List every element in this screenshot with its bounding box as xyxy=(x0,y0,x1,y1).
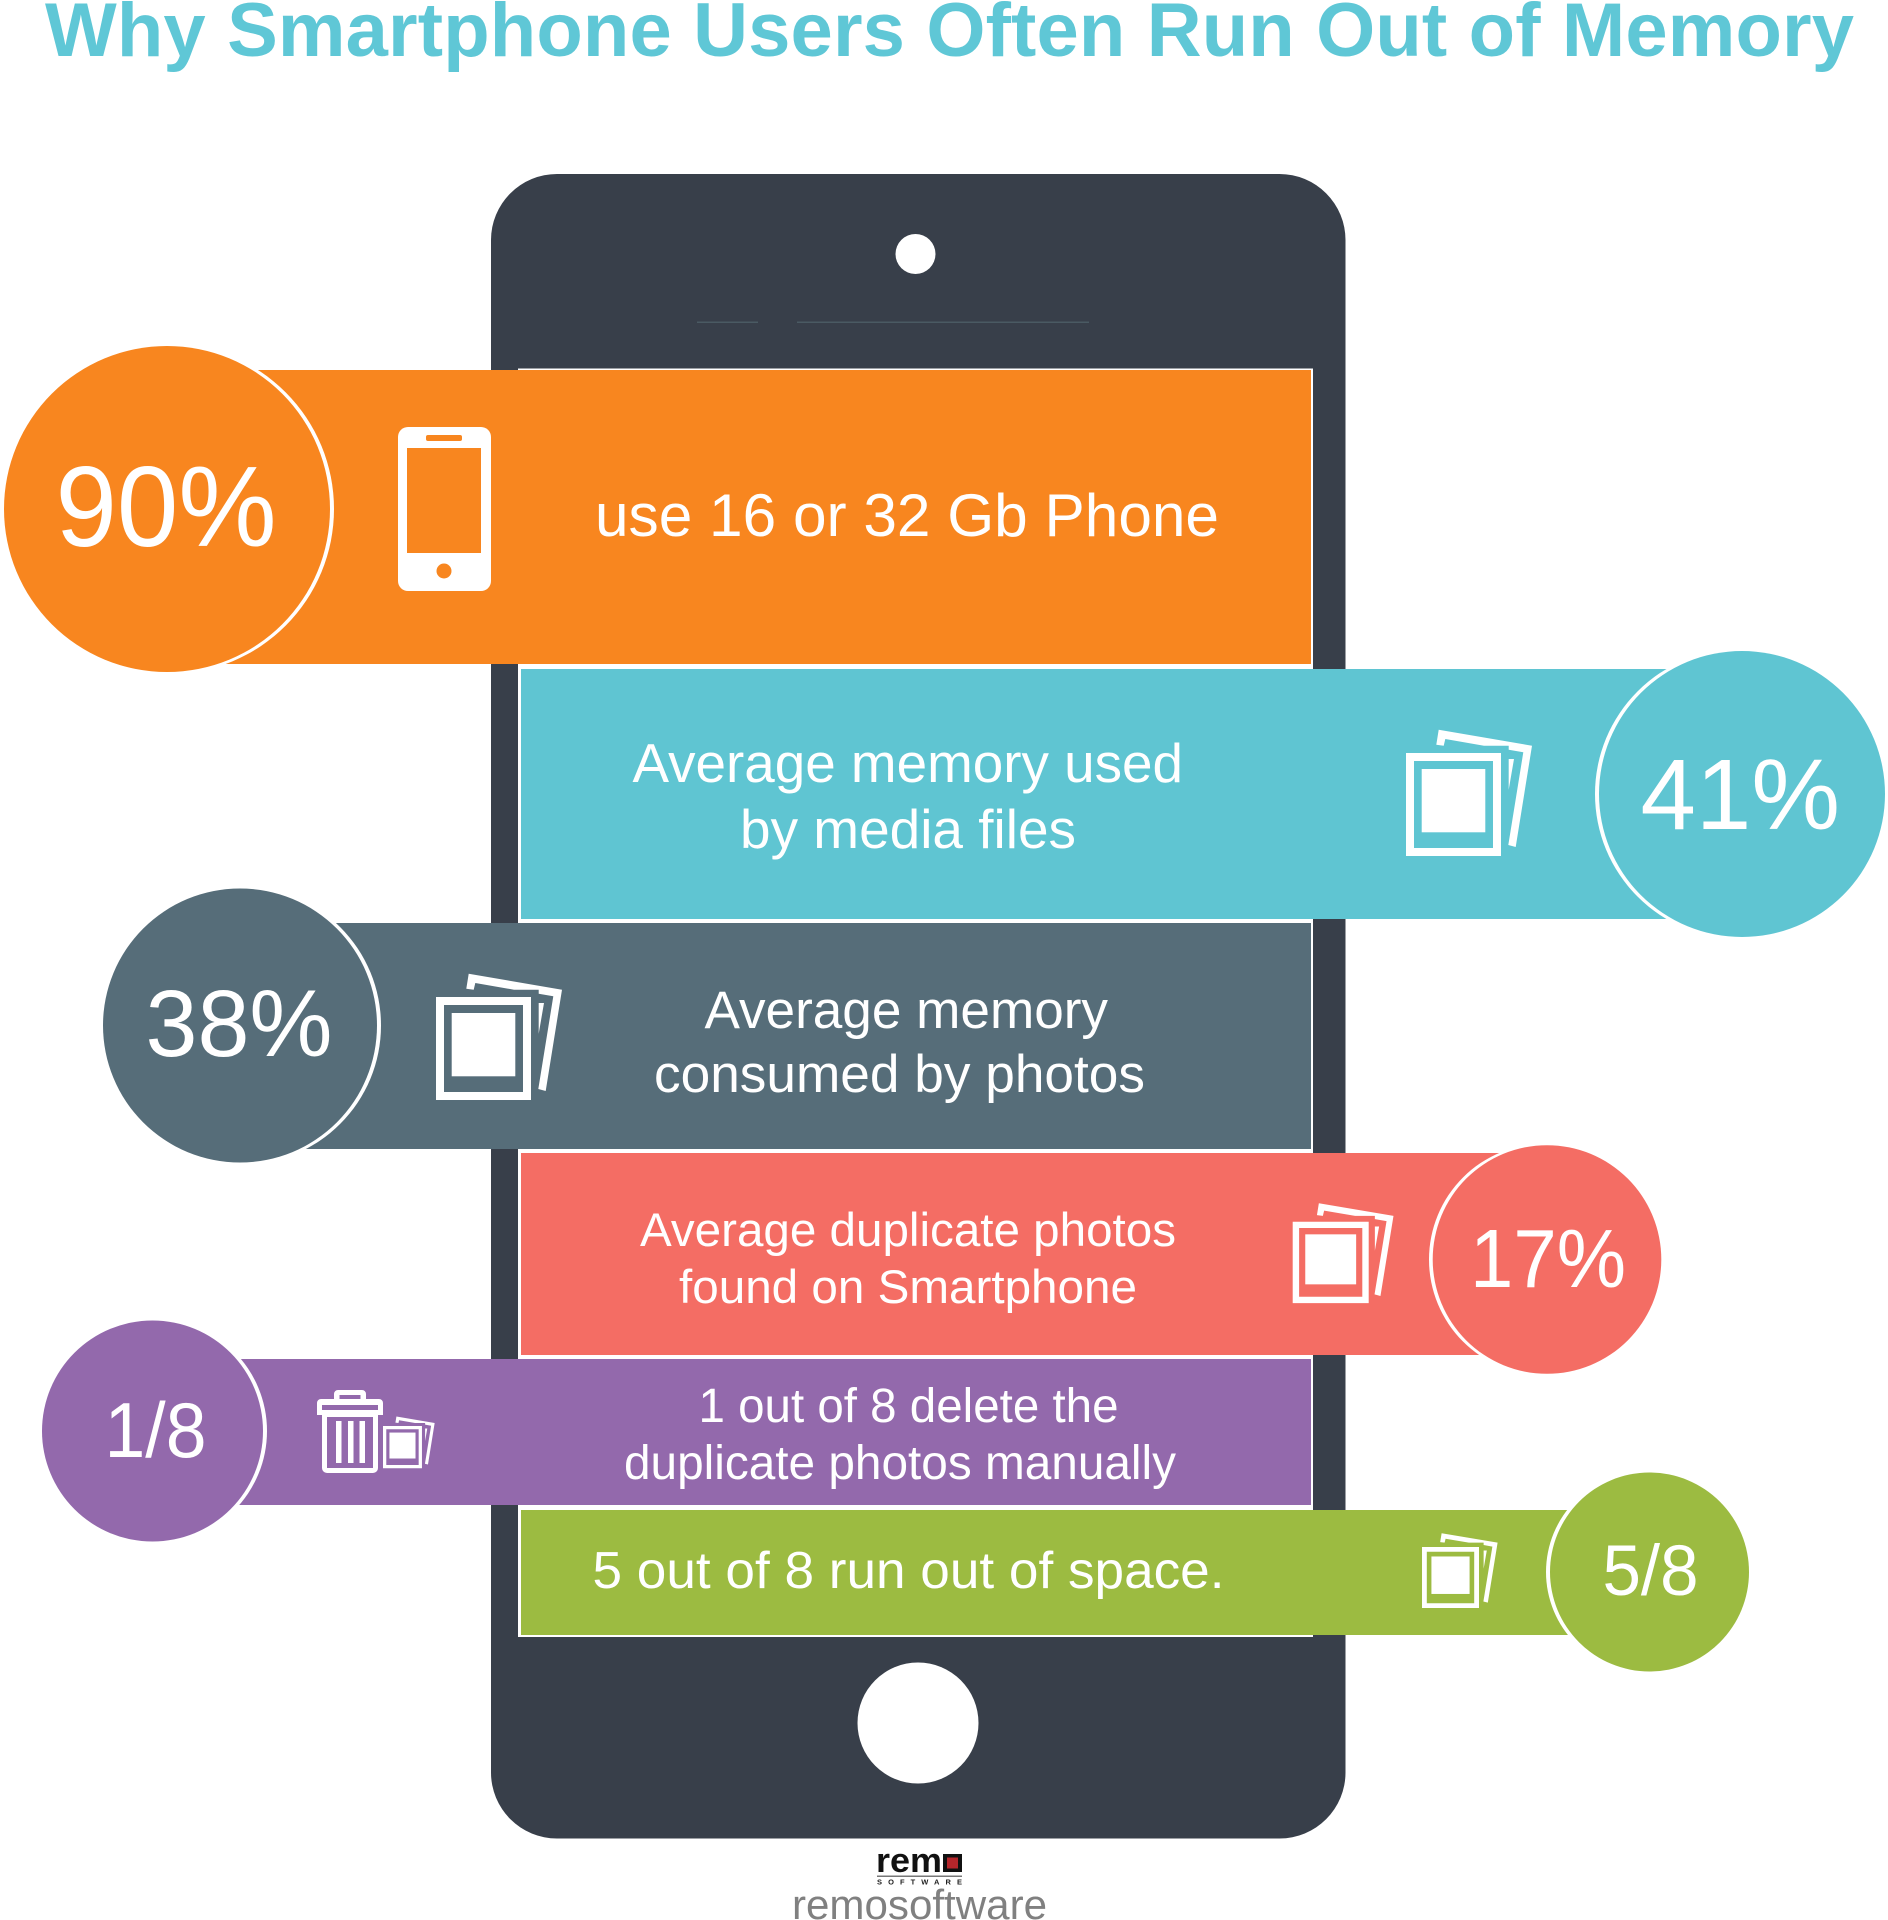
icon: photos small xyxy=(383,1416,435,1468)
panel: 17% red xyxy=(521,1144,1661,1376)
text: 1 out of 8 delete the duplicate photos manually: duplicate photos manually xyxy=(624,1437,1176,1490)
icon: home button xyxy=(858,1662,978,1784)
panel: 38% slate xyxy=(103,886,1311,1164)
stat: 41%: 41% xyxy=(1640,739,1840,851)
panel: 1/8 purple xyxy=(42,1318,1311,1544)
icon: trash can xyxy=(317,1390,383,1473)
phone body xyxy=(491,174,1346,1838)
icon: photos xyxy=(1422,1533,1498,1608)
text: average memory used by media files: by media files xyxy=(740,798,1076,860)
text: average memory used by media files: Average memory used xyxy=(632,732,1183,794)
logo: remo software: SOFTWARE xyxy=(877,1878,962,1886)
logo: remo software xyxy=(876,1842,962,1886)
stat: 38%: 38% xyxy=(146,971,332,1077)
icon: smartphone xyxy=(398,427,491,591)
stat: 1/8: 1/8 xyxy=(104,1386,206,1474)
text: 1 out of 8 delete the duplicate photos manually: 1 out of 8 delete the xyxy=(698,1380,1118,1433)
text: average duplicate photos found on smartphone: found on Smartphone xyxy=(679,1260,1137,1313)
text: average memory consumed by photos: consumed by photos xyxy=(654,1045,1145,1104)
icon: photos xyxy=(1293,1203,1394,1303)
panel: 5/8 green xyxy=(521,1470,1749,1674)
text: average memory consumed by photos xyxy=(654,981,1145,1104)
stat: 17%: 17% xyxy=(1470,1212,1626,1305)
logo: remo software: rem xyxy=(876,1842,942,1880)
text: 1 out of 8 delete the duplicate photos manually xyxy=(624,1380,1176,1490)
text: average duplicate photos found on smartphone xyxy=(640,1203,1176,1313)
icon: phone camera xyxy=(896,234,936,274)
text: use 16 or 32 Gb Phone: use 16 or 32 Gb Phone xyxy=(595,482,1219,549)
stat: 90%: 90% xyxy=(56,444,276,571)
panel: 90% orange xyxy=(4,344,1311,674)
text: average memory used by media files xyxy=(632,732,1183,860)
text: average duplicate photos found on smartphone: Average duplicate photos xyxy=(640,1203,1176,1256)
panel: 41% teal xyxy=(521,649,1885,939)
text: 5 out of 8 run out of space.: 5 out of 8 run out of space. xyxy=(592,1542,1224,1600)
text: average memory consumed by photos: Average memory xyxy=(704,981,1108,1040)
icon: photos xyxy=(1406,730,1532,856)
stat: 5/8: 5/8 xyxy=(1602,1532,1698,1611)
icon: photos xyxy=(436,974,562,1100)
